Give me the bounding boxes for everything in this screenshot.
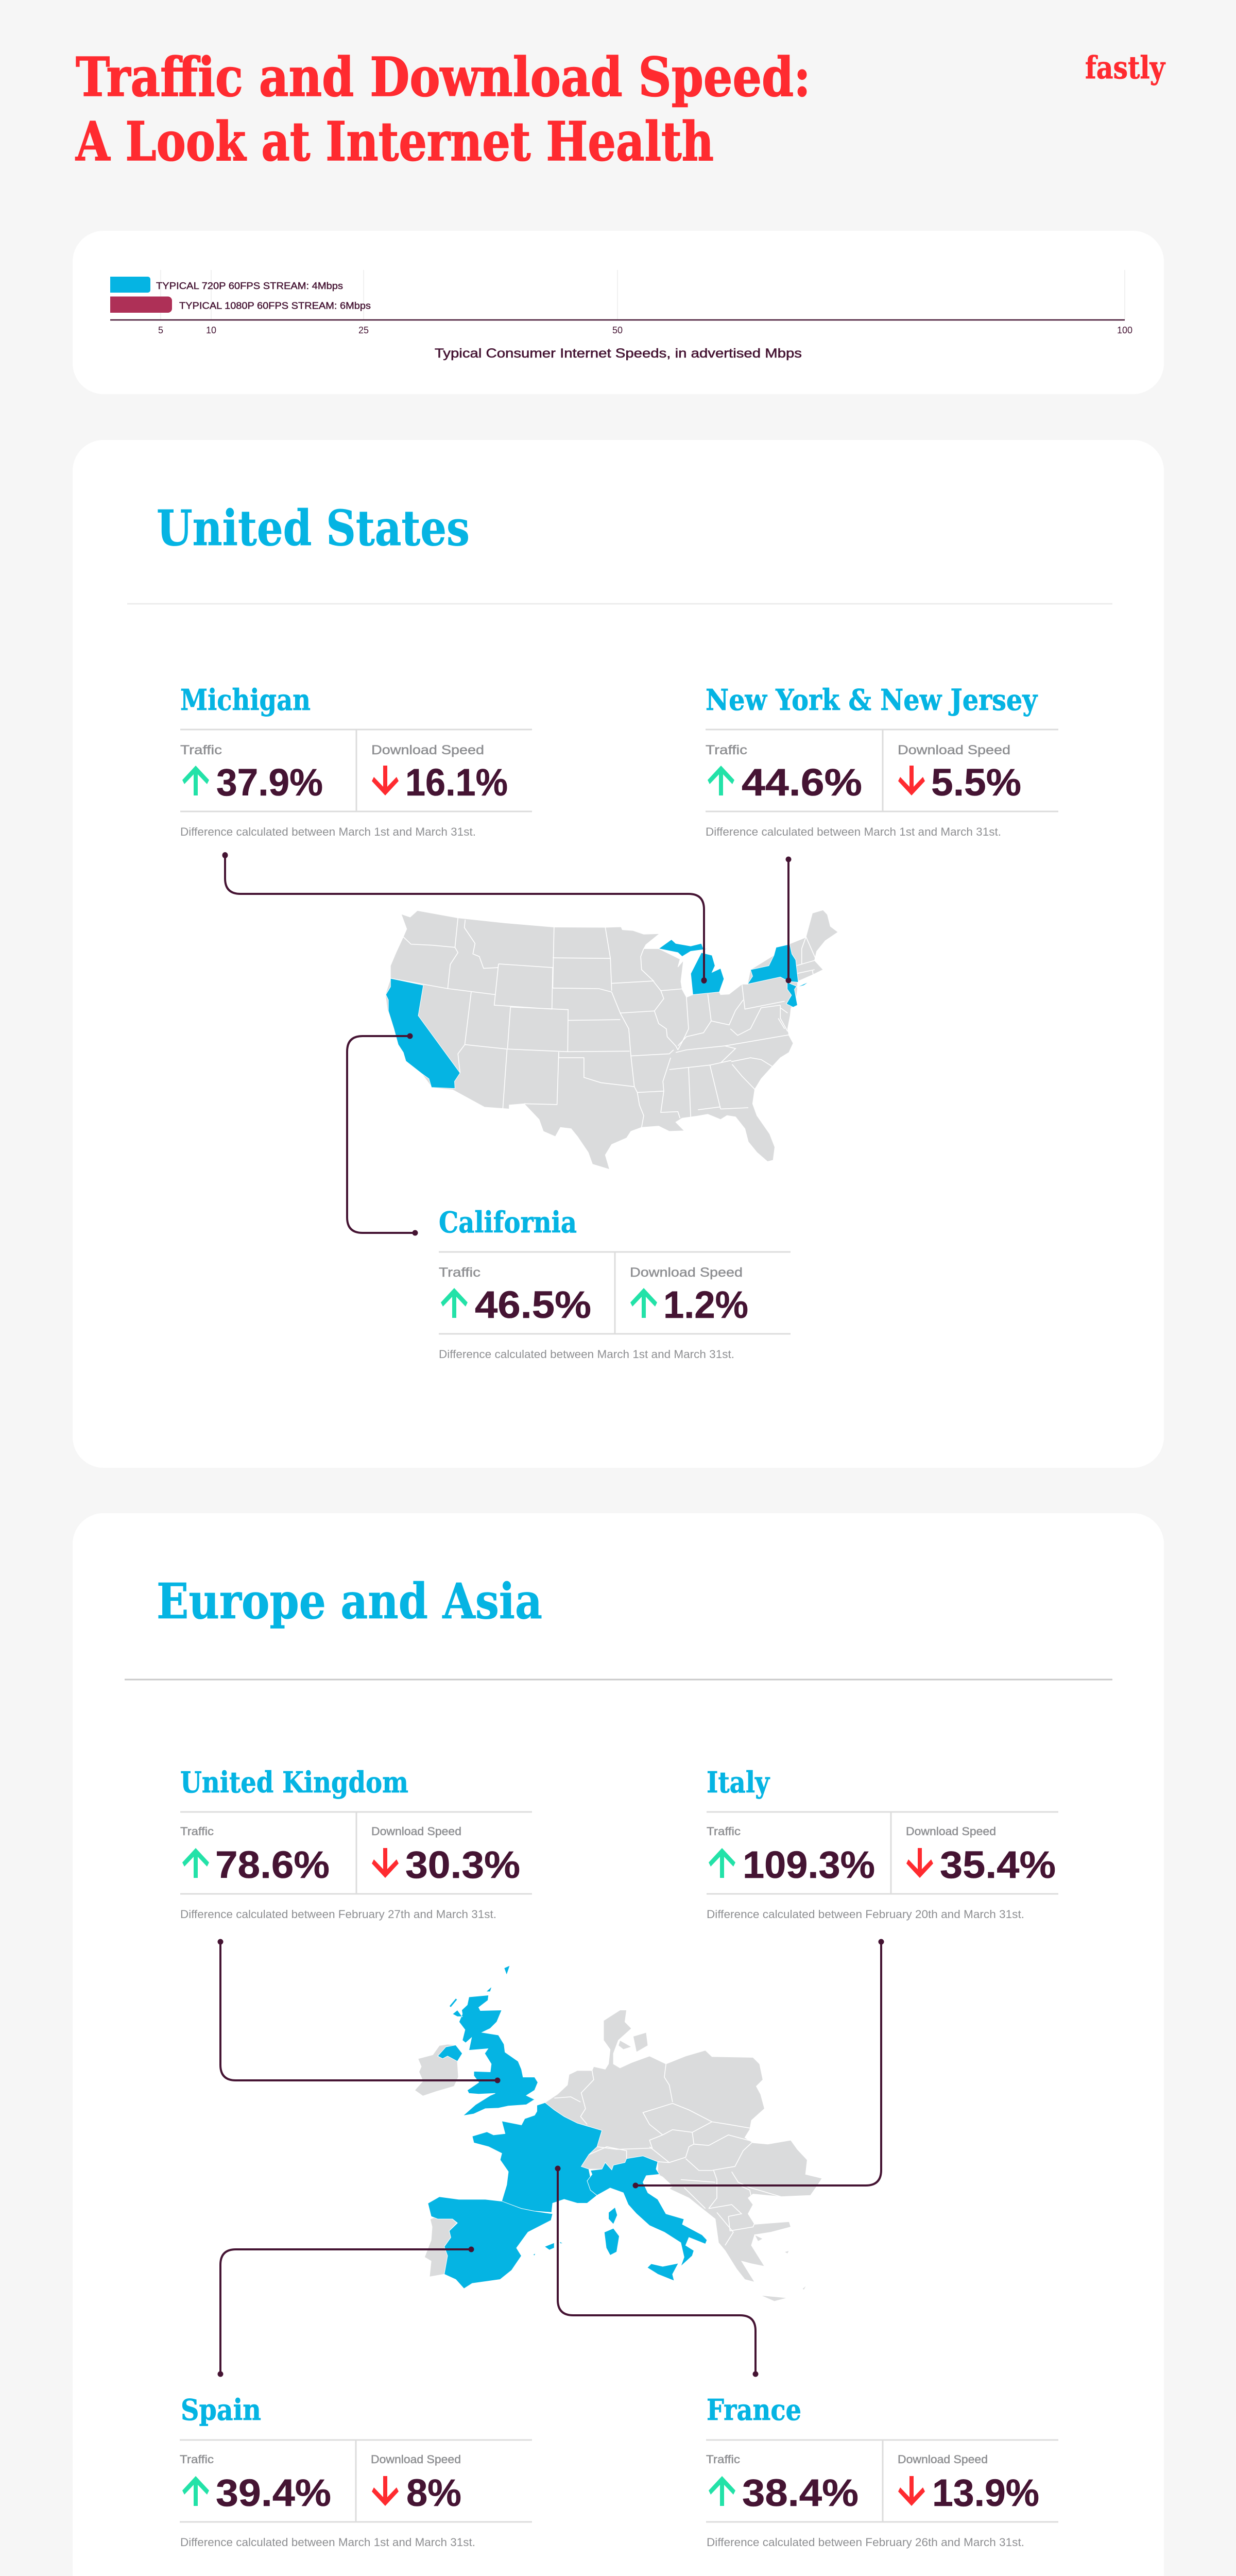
region: France [472,2103,617,2224]
title [75,45,811,173]
arrow: Italy connector [632,1939,884,2189]
stat block: Italy: Difference calculated between February 20th and March 31st. [707,1908,1024,1921]
icon: up arrow [182,2476,209,2506]
icon: down arrow [372,2476,399,2506]
panel: United States [73,440,1164,1468]
stat block: United Kingdom: Difference calculated between February 27th and March 31st. [180,1908,496,1921]
logo: fastly header: fastly [1085,50,1166,86]
stat block: New York and New Jersey: Difference calculated between March 1st and March 31st. [706,825,1001,838]
stat block: Italy: Traffic [707,1825,741,1838]
stat block: Spain: Spain [181,2393,261,2427]
stat block: Michigan: Michigan [180,683,311,717]
stat block: France: 13.9% [932,2471,1039,2514]
arrow: New York connector [786,856,791,983]
stat block: United Kingdom: 30.3% [405,1843,520,1886]
region: Spain [428,2197,563,2289]
bar chart: 50 [612,325,623,335]
stat block: New York and New Jersey: Download Speed [898,743,1010,757]
arrow: California connector [347,1033,418,1235]
arrow: Michigan connector [222,852,707,984]
stat block: California: 46.5% [475,1283,591,1326]
title: Traffic and Download Speed: [76,45,811,109]
region: United Kingdom [438,1965,538,2116]
arrow: Spain connector [217,2246,474,2377]
icon: down arrow [898,766,925,795]
bar chart: 5 [158,325,163,335]
stat block: Michigan: 37.9% [216,761,323,804]
heading: Europe and Asia: Europe and Asia [157,1573,542,1630]
stat block: Spain: Download Speed [371,2453,461,2466]
stat block: California [439,1206,791,1361]
stat block: California: Difference calculated between March 1st and March 31st. [439,1348,734,1361]
bar chart [110,270,1132,361]
stat block: Italy: 35.4% [940,1843,1056,1886]
bar chart: TYPICAL 1080P 60FPS STREAM: 6Mbps [179,300,371,311]
stat block: California: Traffic [439,1265,480,1280]
stat block: Spain: 39.4% [216,2471,331,2514]
stat block: Spain: Traffic [180,2453,214,2466]
stat block: United Kingdom: Download Speed [371,1825,461,1838]
stat block: California: California [439,1206,577,1240]
stat block: Spain: 8% [406,2471,461,2514]
panel: typical consumer internet speeds [73,231,1164,394]
stat block: France: Difference calculated between February 26th and March 31st. [707,2536,1024,2549]
title: A Look at Internet Health [75,110,714,173]
icon: down arrow [372,766,399,795]
icon: up arrow [182,766,209,795]
stat block: California: Download Speed [630,1265,743,1280]
bar chart: 100 [1117,325,1132,335]
stat block: California: 1.2% [663,1283,748,1326]
icon: down arrow [372,1848,399,1878]
stat block: Italy: 109.3% [743,1843,875,1886]
stat block: France: Traffic [706,2453,740,2466]
icon: up arrow [708,766,734,795]
stat block: New York and New Jersey: Traffic [706,743,747,757]
stat block: New York and New Jersey: 5.5% [931,761,1021,804]
region: Italy [587,2156,707,2281]
stat block: Michigan [180,683,532,838]
icon: down arrow [906,1848,933,1878]
stat block: Spain [180,2393,532,2549]
stat block: New York and New Jersey: New York & New Jersey [706,683,1038,717]
icon: up arrow [441,1288,468,1318]
icon: up arrow [182,1848,209,1878]
stat block: France: France [707,2393,801,2427]
bar chart: Typical Consumer Internet Speeds, in advertised Mbps [435,346,802,361]
stat block: Italy: Italy [707,1766,770,1800]
map: Europe [415,1965,822,2301]
stat block: France [706,2393,1058,2549]
arrow: France connector [555,2166,758,2377]
stat block: France: Download Speed [898,2453,988,2466]
heading: United States: United States [157,500,470,557]
stat block: Michigan: 16.1% [405,761,508,804]
bar chart: 10 [206,325,216,335]
stat block: Italy [707,1766,1058,1921]
stat block: New York and New Jersey [706,683,1058,838]
region: Michigan [659,939,724,995]
stat block: United Kingdom: United Kingdom [180,1766,408,1800]
icon: down arrow [898,2476,925,2506]
stat block: France: 38.4% [742,2471,859,2514]
panel: Europe and Asia [73,1513,1164,2576]
stat block: Michigan: Download Speed [371,743,484,757]
region: New York and New Jersey [747,944,810,1007]
icon: up arrow [709,1848,735,1878]
stat block: United Kingdom [180,1766,532,1921]
bar chart: 25 [358,325,369,335]
stat block: United Kingdom: 78.6% [215,1843,330,1886]
map: United States [385,910,838,1170]
stat block: Spain: Difference calculated between March 1st and March 31st. [180,2536,475,2549]
stat block: Italy: Download Speed [906,1825,996,1838]
stat block: Michigan: Traffic [180,743,222,757]
icon: up arrow [709,2476,735,2506]
arrow: United Kingdom connector [217,1939,501,2083]
bar chart: TYPICAL 720P 60FPS STREAM: 4Mbps [156,280,343,291]
stat block: United Kingdom: Traffic [180,1825,214,1838]
icon: up arrow [630,1288,657,1318]
stat block: Michigan: Difference calculated between March 1st and March 31st. [180,825,476,838]
stat block: New York and New Jersey: 44.6% [742,761,862,804]
region: California [386,978,460,1089]
